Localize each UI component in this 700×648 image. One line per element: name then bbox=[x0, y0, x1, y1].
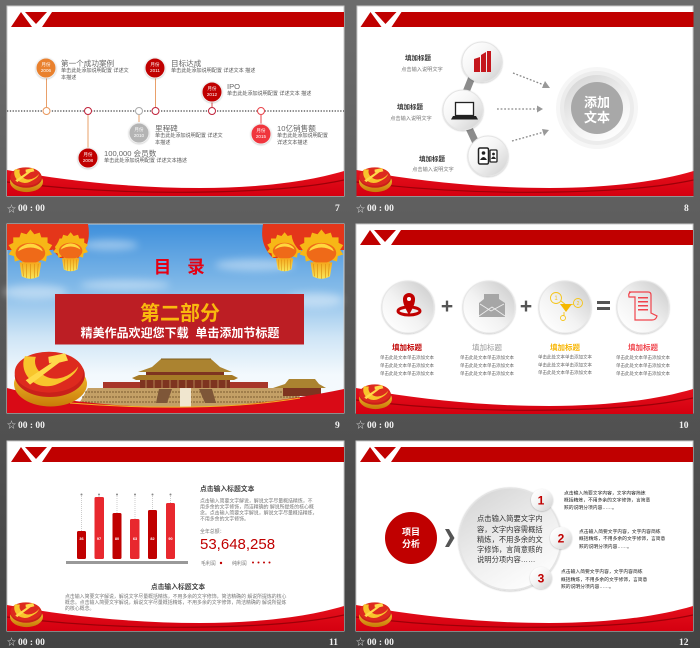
main circle: 字修饰，言简意赅的 bbox=[477, 545, 543, 554]
label 3: 填加标题 bbox=[419, 154, 446, 163]
red circle label: 分析 bbox=[402, 538, 420, 549]
plus sign: + bbox=[520, 295, 532, 318]
icon: party emblem bbox=[10, 602, 43, 627]
milestone 2006: 本描述 bbox=[61, 74, 76, 81]
header band bbox=[11, 12, 344, 27]
circle: building icon bbox=[462, 42, 502, 82]
chevron arrow bbox=[445, 529, 454, 547]
circle: laptop icon bbox=[443, 90, 483, 130]
milestone 2006: 单击此处添加说明配置 详述文 bbox=[61, 67, 129, 74]
right text block: 念。点击输入简要文字解说，解说文字尽量概括精炼， bbox=[200, 510, 317, 516]
number 2 bbox=[550, 527, 572, 549]
plus sign: + bbox=[441, 295, 453, 318]
icon: party emblem bbox=[359, 167, 392, 192]
label 2: 点击输入说明文字 bbox=[390, 114, 432, 122]
label 1 bbox=[401, 53, 443, 73]
target circle: 文本 bbox=[584, 110, 610, 125]
text 1: 赅的说明分项内容……。 bbox=[564, 504, 617, 511]
bar chart bbox=[66, 494, 188, 564]
column text 3: 单击此处文本单击添加文本 bbox=[538, 362, 592, 368]
number 3 bbox=[530, 567, 552, 589]
text 3: 点击输入简要文字内容，文字内容简练 bbox=[561, 568, 643, 575]
bottom text block: 点击输入简要文字解说，解说文字尽量概括精炼，不用多余的文字修饰，简洁精确的 解说所提炼的核心 bbox=[65, 593, 287, 600]
footer: slide 8 bbox=[356, 204, 689, 214]
footer: slide 9: 00 : 00 bbox=[18, 421, 45, 431]
milestone 2012: IPO bbox=[227, 82, 240, 91]
footer: slide 11: ☆ bbox=[7, 637, 16, 647]
circle: funnel: 1 bbox=[554, 296, 558, 302]
footer: slide 7 bbox=[7, 204, 340, 214]
heading: 目 bbox=[154, 257, 171, 277]
text 1: 点击输入简要文字内容，文字内容简练 bbox=[564, 490, 646, 496]
milestone 2010: 本描述 bbox=[155, 139, 170, 146]
milestone 2006: 2006 bbox=[41, 68, 52, 73]
column text 2: 单击此处文本单击添加文本 bbox=[460, 354, 514, 361]
circle: funnel bbox=[539, 281, 591, 333]
milestone 2010: 2010 bbox=[134, 133, 145, 138]
footer: slide 7: 7 bbox=[335, 204, 340, 214]
footer: slide 8: 00 : 00 bbox=[367, 204, 394, 214]
header band bbox=[360, 230, 693, 245]
milestone 2011: 2011 bbox=[150, 68, 160, 73]
heading bbox=[154, 257, 205, 277]
text 2: 点击输入简要文字内容，文字内容简练 bbox=[579, 528, 661, 535]
number 1: 1 bbox=[538, 494, 545, 508]
header band bbox=[360, 447, 693, 462]
red ribbon bbox=[7, 388, 344, 413]
text 1: 概括精炼，不用多余的文字修饰，言简意 bbox=[564, 496, 651, 504]
milestone 2015: 单击此处添加说明配置 bbox=[277, 132, 328, 139]
footer: slide 12 bbox=[356, 637, 689, 648]
bar chart: 97 bbox=[97, 537, 101, 541]
milestone 2008: 月份 bbox=[83, 151, 93, 158]
panel: slide 12 analysis bbox=[356, 441, 693, 631]
clouds bbox=[3, 240, 343, 307]
panel: slide 9 section title bbox=[3, 224, 344, 413]
right text block: 点击输入简要文字解说，解说文字尽量概括精炼，不 bbox=[200, 498, 313, 504]
footer: slide 12: 12 bbox=[679, 638, 689, 648]
column text 1 bbox=[380, 342, 434, 377]
number 2: 2 bbox=[558, 532, 565, 546]
milestone 2015 bbox=[251, 123, 328, 146]
icon: party emblem bbox=[10, 167, 43, 192]
connectors bbox=[466, 77, 476, 143]
milestone 2006 bbox=[36, 58, 129, 81]
milestone 2008: 2008 bbox=[83, 158, 94, 163]
red circle label bbox=[385, 512, 437, 564]
number 3: 3 bbox=[538, 572, 545, 586]
bottom text block: 概念。点击输入简要文字解说，解说文字尽量概括精炼，不用多余的文字修饰，简洁精确的 解说所提炼 bbox=[65, 599, 287, 606]
milestone 2006: 月份 bbox=[41, 61, 51, 68]
milestone 2015: 月份 bbox=[256, 127, 266, 134]
main circle bbox=[459, 488, 561, 590]
panel: slide 8 flow bbox=[356, 6, 694, 196]
bottom text block: 的核心概念。 bbox=[65, 605, 94, 612]
main circle: 精炼，不用多余的文 bbox=[477, 535, 543, 544]
column text 2: 填加标题 bbox=[472, 342, 502, 352]
text 3 bbox=[561, 568, 648, 590]
footer: slide 12: 00 : 00 bbox=[367, 638, 394, 648]
text 3: 赅的说明分项内容……。 bbox=[561, 583, 614, 590]
circle: funnel: 2 bbox=[577, 301, 580, 307]
milestone 2012: 月份 bbox=[207, 85, 217, 92]
column text 2: 单击此处文本单击添加文本 bbox=[460, 362, 514, 369]
column text 4: 填加标题 bbox=[628, 342, 658, 352]
column text 1: 填加标题 bbox=[392, 342, 422, 352]
circle: devices icon bbox=[468, 136, 508, 176]
milestone 2011: 目标达成 bbox=[171, 58, 202, 68]
right text block bbox=[200, 484, 317, 535]
footer: slide 9: 9 bbox=[335, 421, 340, 431]
right lanterns bbox=[262, 224, 344, 279]
column text 4 bbox=[616, 342, 670, 377]
milestone 2011 bbox=[145, 58, 255, 78]
column text 3: 填加标题 bbox=[550, 342, 580, 352]
milestone 2010: 月份 bbox=[134, 126, 144, 133]
title banner: 精美作品欢迎您下载 单击添加节标题 bbox=[81, 325, 279, 340]
milestone 2008: 单击此处添加说明配置 详述文本描述 bbox=[104, 157, 187, 164]
arrowheads bbox=[537, 81, 550, 136]
bottom text block bbox=[65, 582, 287, 612]
sky background bbox=[7, 224, 344, 413]
header band bbox=[360, 12, 694, 27]
column text 3: 单击此处文本单击添加文本 bbox=[538, 369, 592, 376]
circle: location pin bbox=[382, 281, 434, 333]
icon: party emblem bbox=[359, 384, 392, 409]
timeline nodes bbox=[43, 108, 264, 114]
main circle: 容，文字内容需概括 bbox=[477, 525, 543, 534]
footer: slide 7: ☆ bbox=[7, 204, 16, 214]
milestone 2006: 第一个成功案例 bbox=[61, 58, 115, 68]
label 2: 填加标题 bbox=[397, 102, 424, 111]
icon: party emblem bbox=[359, 602, 392, 627]
right text block: 全年总额： bbox=[200, 528, 224, 535]
circle: envelope bbox=[463, 281, 515, 333]
milestone 2012: 2012 bbox=[207, 92, 218, 97]
milestone 2015: 10亿销售额 bbox=[277, 123, 316, 133]
column text 1: 单击此处文本单击添加文本 bbox=[380, 354, 434, 361]
text 2: 赅的说明分项内容……。 bbox=[579, 543, 632, 550]
milestone 2012 bbox=[202, 82, 311, 102]
footer: slide 8: 8 bbox=[684, 204, 689, 214]
red circle label: 项目 bbox=[402, 527, 420, 537]
timeline connectors bbox=[46, 78, 261, 148]
text 2 bbox=[579, 528, 666, 550]
milestone 2011: 月份 bbox=[150, 61, 160, 68]
main circle: 点击输入简要文字内 bbox=[477, 514, 543, 523]
milestone 2015: 2015 bbox=[256, 134, 267, 139]
label 2 bbox=[390, 102, 432, 122]
column text 3 bbox=[538, 342, 592, 376]
milestone 2010: 单击此处添加说明配置 详述文 bbox=[155, 132, 223, 139]
legend: 毛利润 bbox=[201, 560, 216, 567]
text 1 bbox=[564, 490, 651, 511]
left lanterns bbox=[7, 224, 89, 279]
footer: slide 11: 11 bbox=[329, 638, 338, 648]
text 2: 概括精炼，不用多余的文字修饰，言简意 bbox=[579, 535, 666, 542]
heading: 录 bbox=[187, 257, 205, 277]
column text 3: 单击此处文本单击添加文本 bbox=[538, 354, 592, 360]
legend bbox=[201, 560, 270, 567]
right text block: 不用多余的文字修饰。 bbox=[200, 516, 249, 522]
dotted arrows bbox=[497, 73, 544, 141]
footer: slide 12: ☆ bbox=[356, 637, 365, 647]
column text 4: 单击此处文本单击添加文本 bbox=[616, 354, 670, 361]
milestone 2010 bbox=[129, 123, 223, 146]
party emblem large bbox=[14, 352, 87, 406]
milestone 2012: 单击此处添加说明配置 详述文本 描述 bbox=[227, 90, 311, 97]
target circle: 添加 bbox=[584, 95, 610, 110]
label 3 bbox=[412, 154, 454, 173]
equals sign bbox=[597, 301, 610, 310]
title banner bbox=[55, 294, 304, 344]
panel: slide 11 chart bbox=[7, 441, 344, 631]
main circle: 说明分项内容…… bbox=[477, 555, 535, 564]
footer: slide 11 bbox=[7, 637, 338, 648]
footer: slide 10 bbox=[356, 420, 689, 431]
column text 1: 单击此处文本单击添加文本 bbox=[380, 362, 434, 369]
column text 1: 单击此处文本单击添加文本 bbox=[380, 370, 434, 377]
right text block: 用多余的文字修饰，简洁精确的 解说所提炼的核心概 bbox=[200, 504, 314, 510]
total number: 53,648,258 bbox=[200, 536, 275, 553]
panel: slide 7 timeline bbox=[7, 6, 344, 196]
panel: slide 10 formula bbox=[356, 224, 693, 414]
footer: slide 9 bbox=[7, 420, 340, 431]
footer: slide 11: 00 : 00 bbox=[18, 638, 45, 648]
label 1: 填加标题 bbox=[405, 53, 432, 62]
column text 2 bbox=[460, 342, 514, 377]
right text block: 点击输入标题文本 bbox=[200, 484, 255, 493]
text 3: 概括精炼，不用多余的文字修饰，言简意 bbox=[561, 576, 648, 583]
bar chart: 82 bbox=[150, 537, 155, 541]
milestone 2008 bbox=[78, 148, 187, 168]
milestone 2011: 单击此处添加说明配置 详述文本 描述 bbox=[171, 67, 255, 74]
number 1 bbox=[531, 489, 553, 511]
header band bbox=[11, 447, 344, 462]
bar chart: 80 bbox=[115, 537, 119, 541]
circle: scroll bbox=[617, 281, 669, 333]
bar chart: 63 bbox=[133, 537, 137, 541]
milestone 2008: 100,000 会员数 bbox=[104, 148, 157, 158]
footer: slide 9: ☆ bbox=[7, 420, 16, 430]
column text 4: 单击此处文本单击添加文本 bbox=[616, 370, 670, 377]
footer: slide 10: 10 bbox=[679, 421, 689, 431]
milestone 2010: 里程碑 bbox=[155, 123, 178, 133]
bar chart: 36 bbox=[79, 537, 84, 541]
milestone 2015: 详述文本描述 bbox=[277, 139, 308, 146]
footer: slide 10: 00 : 00 bbox=[367, 421, 394, 431]
footer: slide 10: ☆ bbox=[356, 420, 365, 430]
footer: slide 7: 00 : 00 bbox=[18, 204, 45, 214]
column text 2: 单击此处文本单击添加文本 bbox=[460, 370, 514, 377]
column text 4: 单击此处文本单击添加文本 bbox=[616, 362, 670, 369]
palace bbox=[77, 359, 326, 407]
bottom text block: 点击输入标题文本 bbox=[151, 582, 205, 591]
bar chart: 90 bbox=[168, 537, 173, 541]
label 3: 点击输入说明文字 bbox=[412, 165, 454, 173]
target circle bbox=[556, 67, 638, 149]
footer: slide 8: ☆ bbox=[356, 204, 365, 214]
label 1: 点击输入说明文字 bbox=[401, 65, 443, 73]
title banner: 第二部分 bbox=[140, 302, 220, 325]
legend: 纯利润 bbox=[232, 560, 247, 567]
